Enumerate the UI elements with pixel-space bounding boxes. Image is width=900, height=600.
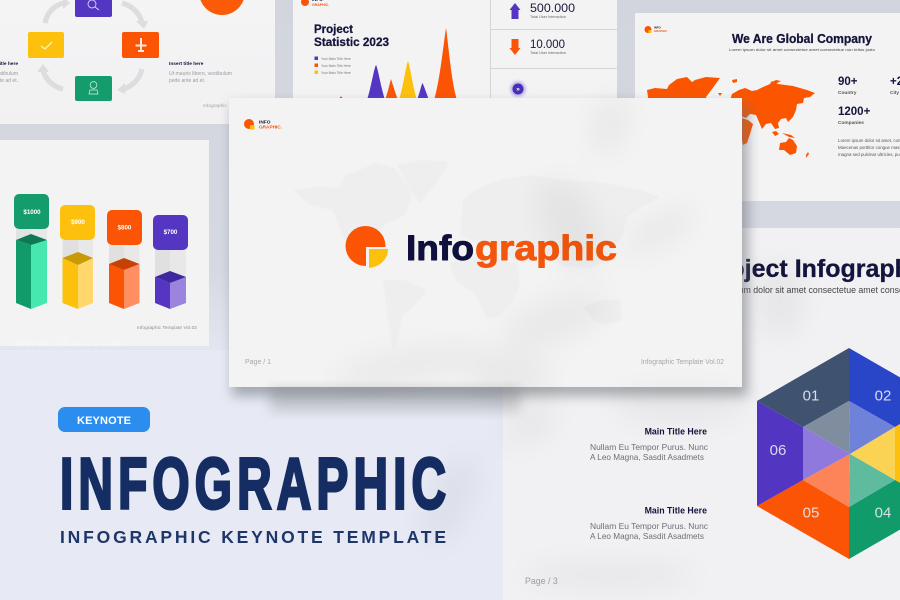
- main logo word: [406, 229, 617, 268]
- stat: 10.000: Total User Interaction: [530, 51, 566, 55]
- icon: circular arrows: [37, 0, 148, 94]
- icon: orange plane tile: [122, 32, 159, 58]
- main title: INFOGRAPHIC: [60, 444, 446, 525]
- bar: 900: $900: [71, 219, 85, 226]
- bar: 700: $700: [164, 229, 178, 236]
- icon: down arrow: [510, 39, 520, 55]
- small logo: INFO: [259, 120, 271, 126]
- panel: top-left process slide: [0, 0, 275, 124]
- heading: we are global company: We Are Global Company: [732, 31, 873, 46]
- hexagon numbers: 02: [875, 388, 891, 404]
- hexagon numbers: 04: [875, 504, 891, 522]
- bar: 700: [153, 215, 188, 309]
- small logo: GRAPHIC.: [259, 124, 282, 130]
- small logo: GRAPHIC.: [312, 3, 329, 7]
- main logo icon: [346, 226, 390, 271]
- world map orange: [647, 77, 815, 158]
- stat: 90+ country: Country: [838, 90, 857, 96]
- main logo word: Info: [406, 229, 474, 268]
- body text: [838, 138, 900, 157]
- stat: 90+ country: [838, 76, 858, 96]
- stat: 1200+ companies: 1200+: [838, 106, 871, 118]
- stat: 1200+ companies: Companies: [838, 120, 864, 126]
- stat: 90+ country: 90+: [838, 76, 858, 88]
- text block: first item: [590, 426, 709, 462]
- hexagon numbers: [770, 388, 891, 522]
- small logo: GRAPHIC.: [654, 29, 668, 33]
- stat: 10.000: 10.000: [530, 37, 565, 51]
- chart legend: [314, 56, 351, 75]
- hexagon chart: [757, 348, 900, 559]
- page label: Page / 1: [245, 359, 271, 366]
- bar: 1000: [14, 194, 49, 309]
- leaf shadows overlay: [328, 89, 805, 589]
- text: right caption: Infographic: [203, 103, 227, 109]
- small logo: INFO: [654, 26, 662, 30]
- cover slide cast shadow: [270, 388, 520, 412]
- stat: +2 city: City: [890, 90, 899, 96]
- text block: second item: Nullam Eu Tempor Purus. Nunc: [590, 521, 709, 531]
- footer text: Infographic Template Vol.02: [137, 325, 197, 331]
- text: right caption: Insert title here: [169, 61, 204, 67]
- stat: 1200+ companies: [838, 106, 871, 126]
- page number: Page / 3: [525, 576, 558, 586]
- template label: Infographic Template Vol.02: [641, 359, 724, 366]
- chart legend: Your Main Title Here: [321, 71, 351, 75]
- heading: project statistic: Project: [314, 24, 353, 36]
- panel: global company slide: [635, 13, 900, 201]
- chart legend: Your Main Title Here: [321, 64, 351, 68]
- chart legend: Your Main Title Here: [321, 57, 351, 61]
- stat: 500.000: 500.000: [530, 1, 575, 15]
- keynote badge: KEYNOTE: [77, 415, 131, 427]
- text block: second item: Main Title Here: [645, 506, 707, 516]
- panel: bar chart slide: [0, 140, 209, 350]
- small logo: [301, 0, 329, 7]
- bar: 800: $800: [118, 224, 132, 232]
- text block: second item: [590, 506, 709, 541]
- faint world map: [293, 160, 660, 350]
- small logo: [244, 119, 282, 130]
- text block: second item: A Leo Magna, Sasdit Asadmets: [590, 531, 704, 541]
- text: left caption: [0, 61, 18, 84]
- bar: 1000: $1000: [23, 209, 41, 216]
- text: right caption: pede ante ad et.: [169, 78, 205, 84]
- hexagon numbers: 01: [803, 388, 819, 404]
- heading: project statistic: Statistic 2023: [314, 37, 389, 49]
- bar: 900: [60, 205, 95, 309]
- watermark: www.25xt.com: [13, 335, 122, 350]
- panel: hexagon slide: [503, 228, 900, 600]
- icon: next button: [510, 82, 526, 96]
- text: right caption: [169, 61, 232, 109]
- decorative orange circle: [199, 0, 245, 15]
- stat: 500.000: Total User Interaction: [530, 15, 566, 19]
- hexagon numbers: 06: [770, 442, 786, 459]
- peak chart: [338, 28, 457, 100]
- subtitle: Lorem ipsum dolor sit amet consectetue amet consectetue non tellus justo: [729, 47, 876, 52]
- hexagon numbers: 05: [803, 504, 819, 522]
- icon: up arrow: [510, 3, 520, 19]
- panel: project statistic slide: [293, 0, 617, 100]
- icon: yellow check tile: [28, 32, 64, 58]
- text block: first item: Nullam Eu Tempor Purus. Nunc: [590, 442, 709, 452]
- icon: next button: »: [516, 86, 520, 93]
- center slide shadow: [232, 104, 748, 396]
- main logo word: graphic: [475, 229, 617, 268]
- bar: 800: [107, 210, 142, 309]
- subtitle: INFOGRAPHIC KEYNOTE TEMPLATE: [60, 527, 446, 547]
- panel: center cover slide: [229, 98, 742, 387]
- stat: +2 city: [890, 76, 900, 96]
- panel divider lines: [490, 0, 617, 100]
- icon: purple search tile: [75, 0, 112, 17]
- icon: green user tile: [75, 76, 112, 101]
- heading: project statistic: [314, 24, 389, 49]
- text block: first item: Main Title Here: [645, 426, 707, 436]
- keynote badge: [58, 407, 150, 432]
- small logo: [644, 26, 668, 33]
- text: right caption: Ut mauris libero, vestibulum: [169, 71, 232, 77]
- text block: first item: A Leo Magna, Sasdit Asadmets: [590, 452, 704, 462]
